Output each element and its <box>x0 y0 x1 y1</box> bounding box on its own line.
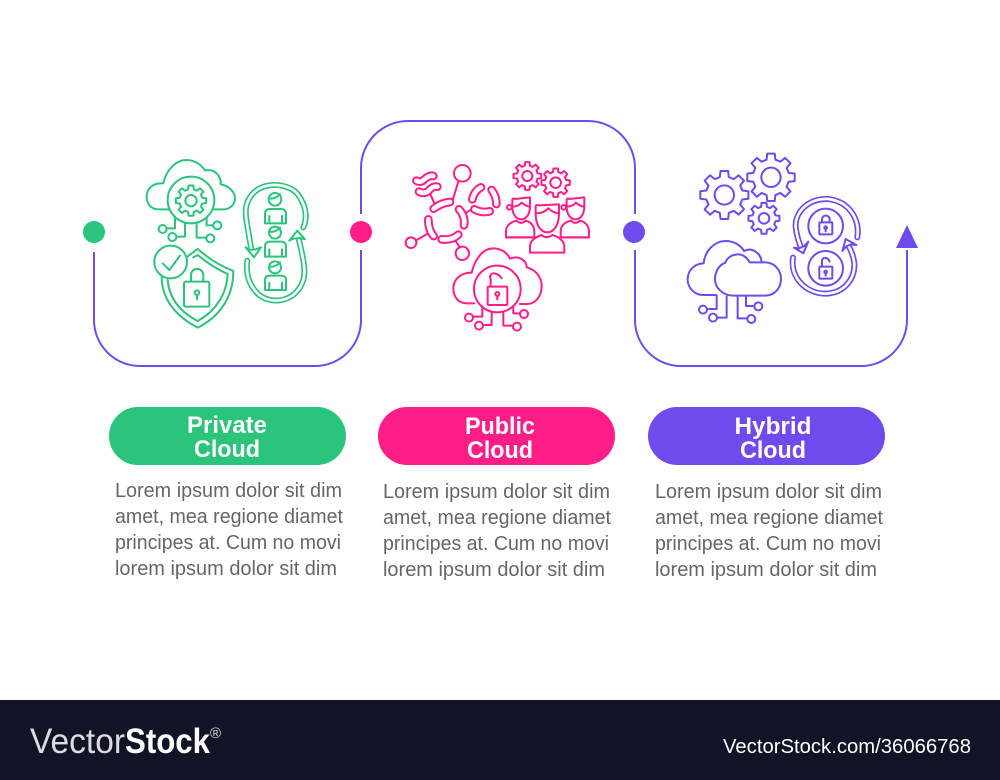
text block: public cloud <box>383 481 611 581</box>
pill heading: public cloud: Public <box>465 413 535 440</box>
marker: pink dot <box>350 221 372 243</box>
marker: purple dot <box>623 221 645 243</box>
text block: private cloud: amet, mea regione diamet <box>115 506 343 528</box>
text block: hybrid cloud: principes at. Cum no movi <box>655 533 881 555</box>
panel: public cloud <box>378 407 615 581</box>
connector line <box>94 121 907 366</box>
text block: hybrid cloud: lorem ipsum dolor sit dim <box>655 559 877 581</box>
text block: private cloud: principes at. Cum no movi <box>115 532 341 554</box>
text block: public cloud: principes at. Cum no movi <box>383 533 609 555</box>
pill heading: hybrid cloud: Hybrid <box>734 413 812 440</box>
pill heading: hybrid cloud <box>648 407 885 465</box>
text block: hybrid cloud <box>655 481 883 581</box>
footer logo: ® <box>210 725 221 742</box>
icon: private cloud <box>147 160 306 328</box>
pill heading: private cloud: Private <box>187 412 267 439</box>
pill heading: public cloud <box>378 407 615 465</box>
text block: public cloud: amet, mea regione diamet <box>383 507 611 529</box>
text block: public cloud: Lorem ipsum dolor sit dim <box>383 481 610 503</box>
pill heading: private cloud <box>109 407 346 465</box>
pill heading: public cloud: Cloud <box>467 437 533 464</box>
footer logo: Stock <box>125 722 210 761</box>
panel: hybrid cloud <box>648 407 885 581</box>
text block: hybrid cloud: Lorem ipsum dolor sit dim <box>655 481 882 503</box>
text block: private cloud: Lorem ipsum dolor sit dim <box>115 480 342 502</box>
text block: private cloud: lorem ipsum dolor sit dim <box>115 558 337 580</box>
text block: hybrid cloud: amet, mea regione diamet <box>655 507 883 529</box>
footer bar <box>0 700 1000 780</box>
pill heading: private cloud: Cloud <box>194 436 260 463</box>
footer logo <box>30 722 221 761</box>
marker: green dot <box>83 221 105 243</box>
icon: public cloud <box>406 162 589 331</box>
text block: public cloud: lorem ipsum dolor sit dim <box>383 559 605 581</box>
panel: private cloud <box>109 407 346 580</box>
arrow: purple triangle <box>896 225 918 248</box>
pill heading: hybrid cloud: Cloud <box>740 437 806 464</box>
text block: private cloud <box>115 480 343 580</box>
icon: hybrid cloud <box>688 154 858 323</box>
footer image id: VectorStock.com/36066768 <box>723 736 971 758</box>
footer logo: Vector <box>30 722 125 761</box>
